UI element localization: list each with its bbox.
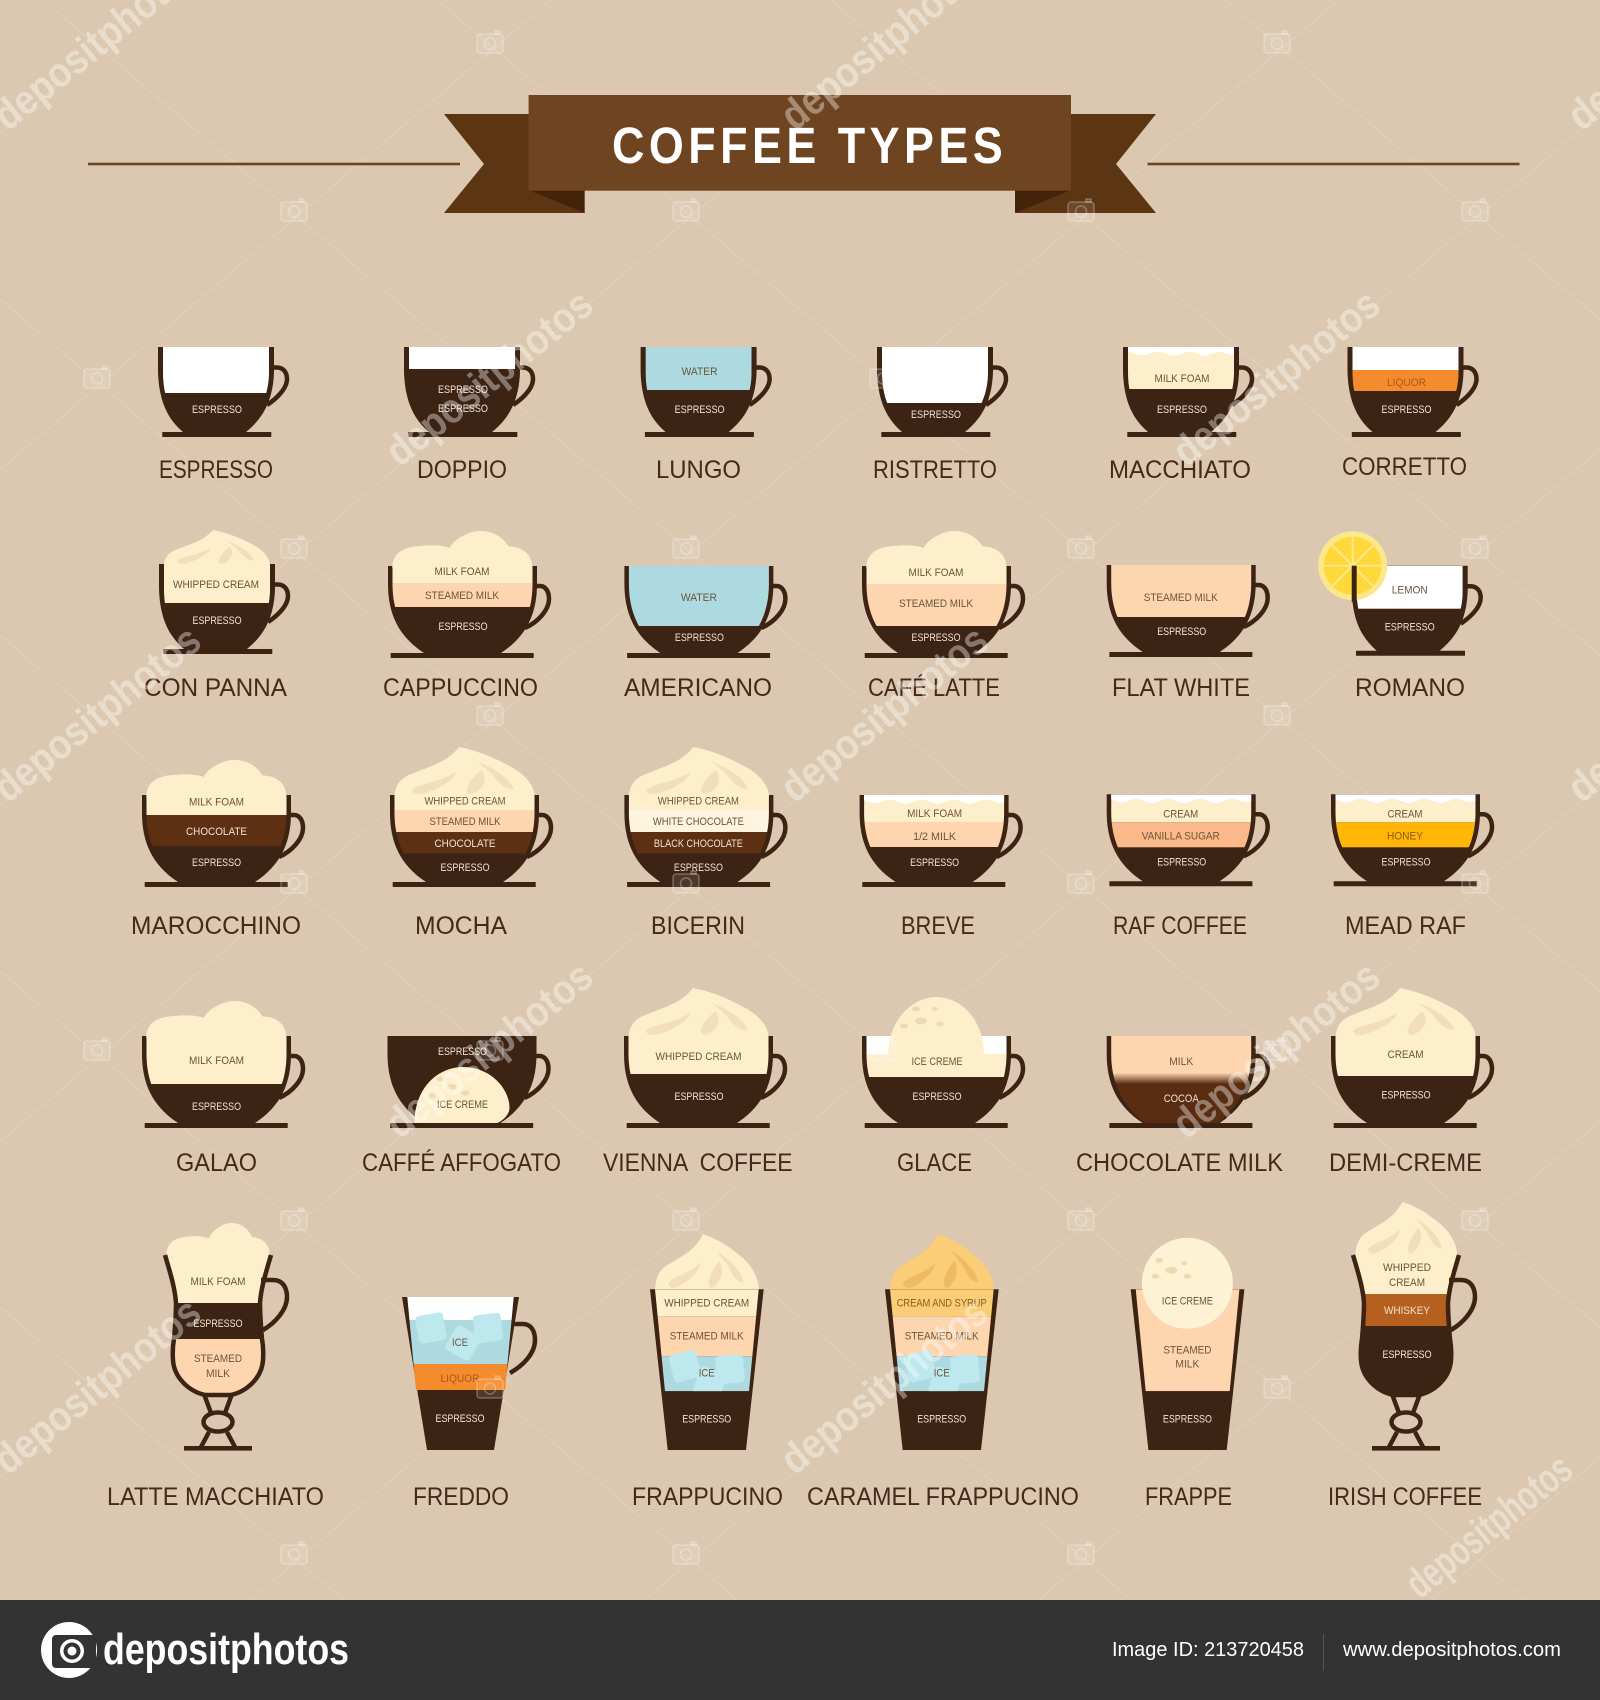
drink: raf coffee: [1107, 794, 1268, 940]
cup: ESPRESSO: [912, 1091, 962, 1103]
ice cream scoop: [1142, 1238, 1233, 1329]
cup: [1107, 1036, 1268, 1128]
cup: LIQUOR: [1387, 377, 1426, 389]
drink: caramel frappucino: [807, 1234, 1079, 1511]
name: CARAMEL FRAPPUCINO: [807, 1483, 1079, 1511]
glass: ICE: [699, 1367, 715, 1379]
drink: irish coffee: [1328, 1202, 1482, 1511]
drink: freddo: [402, 1297, 535, 1511]
drink: americano: [624, 566, 785, 702]
cup: CREAM: [1388, 808, 1422, 820]
name: CON PANNA: [144, 674, 287, 702]
name: CHOCOLATE MILK: [1076, 1149, 1283, 1177]
drink: cafe latte: [862, 531, 1023, 702]
drink: doppio: [404, 347, 533, 484]
glass: ESPRESSO: [1163, 1413, 1212, 1425]
drink: ristretto: [873, 347, 1006, 484]
drink: caffe affogato: [362, 1036, 561, 1177]
cup: [860, 795, 1021, 887]
drink: bicerin: [624, 747, 785, 940]
cup: [404, 347, 533, 437]
glass: [163, 1223, 287, 1450]
glass: [885, 1234, 999, 1450]
cup: [624, 747, 785, 887]
cup: [624, 988, 785, 1128]
cup: [388, 1036, 548, 1128]
cup: MILK FOAM: [189, 1055, 244, 1067]
name: DEMI-CREME: [1329, 1149, 1482, 1177]
glass: MILK FOAM: [190, 1276, 246, 1288]
cup: [1348, 347, 1476, 437]
cup: [1107, 565, 1268, 657]
ice cream scoop: [888, 997, 984, 1055]
cup: WATER: [681, 592, 717, 604]
name: CORRETTO: [1342, 453, 1467, 481]
drink: marocchino: [131, 760, 303, 940]
name: CAFFÉ AFFOGATO: [362, 1148, 561, 1177]
name: CAFÉ LATTE: [868, 673, 1000, 702]
glass: ESPRESSO: [1382, 1349, 1432, 1361]
cup: ESPRESSO: [1157, 856, 1207, 868]
cup: ICE CREME: [912, 1056, 962, 1068]
cup: [862, 531, 1023, 658]
glass: WHIPPED CREAM: [664, 1297, 749, 1309]
drink: cappuccino: [383, 531, 549, 702]
watermark camera icons: [84, 31, 1488, 1564]
cup: [390, 747, 551, 887]
drink: corretto: [1342, 347, 1476, 481]
title banner: [88, 95, 1520, 213]
name: RAF COFFEE: [1113, 912, 1247, 940]
drink: demi-creme: [1329, 988, 1492, 1177]
name: VIENNA COFFEE: [603, 1149, 792, 1177]
name: CAPPUCCINO: [383, 674, 538, 702]
glass: ESPRESSO: [436, 1413, 485, 1425]
cup: MILK FOAM: [908, 567, 964, 579]
cup: WATER: [682, 366, 718, 378]
cup: ESPRESSO: [192, 857, 241, 869]
cup: ESPRESSO: [674, 1091, 724, 1103]
heading: COFFEE TYPES: [612, 118, 1003, 175]
website: www.depositphotos.com: [1342, 1639, 1561, 1661]
name: FREDDO: [413, 1483, 509, 1511]
name: MACCHIATO: [1109, 456, 1251, 484]
glass: [402, 1297, 535, 1450]
cup: MILK FOAM: [1154, 373, 1210, 385]
cup: WHIPPED CREAM: [656, 1051, 742, 1063]
glass: [1131, 1238, 1245, 1450]
name: FRAPPUCINO: [632, 1483, 783, 1511]
cup: ESPRESSO: [438, 1046, 487, 1058]
glass: ICE CREME: [1162, 1295, 1213, 1307]
drink: galao: [142, 1001, 303, 1177]
glass: WHISKEY: [1384, 1305, 1431, 1317]
cup: ESPRESSO: [911, 409, 961, 421]
cup: [142, 760, 303, 887]
glass: CREAM: [1389, 1277, 1425, 1289]
glass: MILK: [206, 1368, 231, 1380]
drink: con panna: [144, 530, 288, 702]
cup: ESPRESSO: [440, 862, 490, 874]
cup: WHIPPED CREAM: [173, 579, 259, 591]
cup: ESPRESSO: [675, 404, 725, 416]
name: DOPPIO: [417, 456, 507, 484]
name: IRISH COFFEE: [1328, 1483, 1482, 1511]
cup: STEAMED MILK: [1144, 592, 1218, 604]
name: FRAPPE: [1145, 1483, 1232, 1511]
cup: ESPRESSO: [1385, 622, 1435, 634]
drink: romano: [1318, 531, 1481, 702]
cup: ESPRESSO: [1157, 626, 1207, 638]
watermark text: depositphotos: [1163, 952, 1389, 1147]
cup: [862, 997, 1023, 1128]
drink: macchiato: [1109, 347, 1252, 484]
ice cream scoop: [414, 1067, 510, 1123]
glass: WHIPPED: [1383, 1262, 1431, 1274]
cup: MILK: [1169, 1056, 1194, 1068]
name: MAROCCHINO: [131, 912, 301, 940]
name: BREVE: [901, 912, 975, 940]
cup: MILK FOAM: [434, 566, 490, 578]
name: LUNGO: [656, 456, 741, 484]
drink: mocha: [390, 747, 551, 940]
cup: ESPRESSO: [438, 621, 488, 633]
drink: mead raf: [1331, 794, 1492, 940]
cup: ESPRESSO: [438, 384, 488, 396]
drink: chocolate milk: [1076, 1036, 1283, 1177]
glass: CREAM AND SYRUP: [897, 1297, 987, 1309]
cup: CREAM: [1163, 808, 1198, 820]
drink: glace: [862, 997, 1023, 1177]
cup: [1123, 347, 1252, 437]
cup: WHITE CHOCOLATE: [653, 816, 744, 828]
cup: ICE CREME: [437, 1099, 488, 1111]
glass: [1351, 1202, 1475, 1450]
glass: MILK: [1175, 1358, 1200, 1370]
logo wordmark: depositphotos: [103, 1625, 349, 1674]
watermark text: depositphotos: [376, 280, 602, 475]
cup: HONEY: [1387, 830, 1424, 842]
drink: frappucino: [632, 1234, 783, 1511]
cup: [388, 531, 549, 658]
cup: [142, 1001, 303, 1128]
name: MEAD RAF: [1345, 912, 1466, 940]
cup: CHOCOLATE: [434, 838, 496, 850]
cup: 1/2 MILK: [913, 831, 957, 843]
cup: STEAMED MILK: [430, 816, 501, 828]
cup: MILK FOAM: [907, 808, 962, 820]
image id: Image ID: 213720458: [1112, 1639, 1304, 1661]
cup: BLACK CHOCOLATE: [654, 838, 743, 850]
cup: [641, 347, 770, 437]
cup: MILK FOAM: [189, 796, 244, 808]
drink: vienna coffee: [603, 988, 792, 1177]
glass: [650, 1234, 764, 1450]
cup: ESPRESSO: [1382, 856, 1431, 868]
cup: ESPRESSO: [1382, 1090, 1431, 1102]
name: MOCHA: [415, 912, 507, 940]
drink: breve: [860, 795, 1021, 940]
cup: VANILLA SUGAR: [1142, 830, 1220, 842]
cup: [1107, 794, 1268, 886]
glass: ICE: [934, 1367, 950, 1379]
name: BICERIN: [651, 912, 745, 940]
cup: CREAM: [1388, 1049, 1424, 1061]
glass: ESPRESSO: [682, 1413, 732, 1425]
cup: ESPRESSO: [1382, 404, 1432, 416]
glass: ICE: [452, 1337, 468, 1349]
cup: [624, 566, 785, 658]
cup: ESPRESSO: [438, 403, 488, 415]
watermark text: depositphotos: [771, 1288, 997, 1483]
cup: ESPRESSO: [674, 862, 723, 874]
cup: ESPRESSO: [1157, 404, 1207, 416]
cup: [1331, 794, 1492, 886]
cup: ESPRESSO: [675, 632, 724, 644]
footer bar: [0, 1600, 1600, 1700]
name: AMERICANO: [624, 674, 772, 702]
name: RISTRETTO: [873, 456, 997, 484]
glass: LIQUOR: [440, 1373, 480, 1385]
cup: STEAMED MILK: [899, 598, 974, 610]
watermark text: depositphotos: [1163, 280, 1389, 475]
drink: frappe: [1131, 1238, 1245, 1511]
cup: ESPRESSO: [192, 1101, 241, 1113]
drink: lungo: [641, 347, 770, 484]
glass: STEAMED MILK: [905, 1330, 979, 1342]
cup: [1318, 531, 1481, 656]
cup: [159, 530, 288, 654]
logo icon: camera: [41, 1622, 97, 1678]
glass: ESPRESSO: [917, 1413, 967, 1425]
cup: ESPRESSO: [910, 857, 959, 869]
glass: STEAMED MILK: [670, 1330, 744, 1342]
watermark text: depositphotos: [376, 952, 602, 1147]
drink: latte macchiato: [107, 1223, 324, 1511]
name: GLACE: [897, 1149, 972, 1177]
cup: ESPRESSO: [192, 615, 242, 627]
cup: COCOA: [1164, 1093, 1199, 1105]
drink: flat white: [1107, 565, 1268, 702]
glass: STEAMED: [194, 1353, 242, 1365]
glass: ESPRESSO: [194, 1318, 243, 1330]
cup: STEAMED MILK: [425, 590, 500, 602]
cup: WHIPPED CREAM: [424, 796, 506, 808]
name: GALAO: [176, 1149, 257, 1177]
name: FLAT WHITE: [1112, 674, 1250, 702]
icon: lemon slice: [1318, 531, 1387, 600]
watermark text: depositphotos: [771, 616, 997, 811]
cup: WHIPPED CREAM: [658, 796, 739, 808]
cup: ESPRESSO: [192, 404, 242, 416]
cup: [1331, 988, 1492, 1128]
drink: espresso: [158, 347, 287, 484]
cup: ESPRESSO: [912, 632, 961, 644]
name: ESPRESSO: [159, 456, 273, 484]
name: LATTE MACCHIATO: [107, 1483, 324, 1511]
cup: CHOCOLATE: [186, 826, 247, 838]
name: ROMANO: [1355, 674, 1465, 702]
glass: STEAMED: [1163, 1344, 1211, 1356]
cup: LEMON: [1392, 585, 1428, 597]
